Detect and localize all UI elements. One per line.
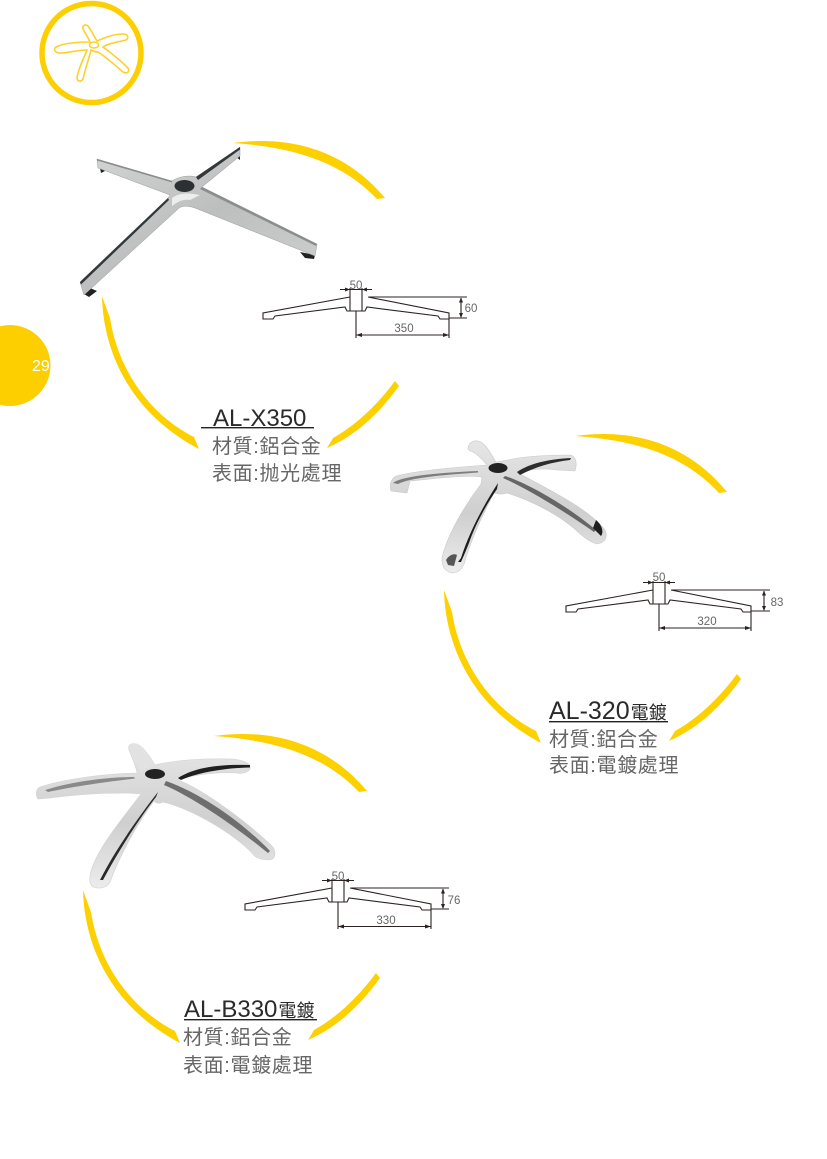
label: model and specs xyxy=(201,405,342,485)
diagram: side profile with dimensions: 60 xyxy=(465,303,477,315)
icon: yellow circle with five-star chair base xyxy=(42,4,141,102)
diagram: side profile with dimensions xyxy=(566,572,783,631)
diagram: side profile with dimensions: 83 xyxy=(771,597,783,609)
label: model and specs: 表面:抛光處理 xyxy=(212,462,342,485)
label: model and specs: 材質:鋁合金 xyxy=(183,1026,292,1049)
label: model and specs: 材質:鋁合金 xyxy=(212,435,321,458)
arc: yellow ring segments xyxy=(83,734,380,1043)
label: model and specs: 材質:鋁合金 xyxy=(549,728,658,751)
diagram: side profile with dimensions: 76 xyxy=(448,895,460,907)
label: model and specs: 表面:電鍍處理 xyxy=(183,1054,313,1077)
diagram: side profile with dimensions: 320 xyxy=(697,616,717,628)
diagram: side profile with dimensions: 50 xyxy=(653,572,665,584)
diagram: side profile with dimensions: 350 xyxy=(394,323,414,335)
label: model and specs: AL-B330電鍍 xyxy=(184,996,314,1023)
page number tab xyxy=(0,325,50,406)
diagram: side profile with dimensions xyxy=(263,280,477,338)
panel: AL-B330 xyxy=(36,734,460,1077)
label: model and specs: AL-X350 xyxy=(213,405,306,432)
product photo: chrome five-star base xyxy=(390,441,606,573)
diagram: side profile with dimensions: 50 xyxy=(350,280,362,292)
product photo: chrome five-star base xyxy=(36,744,275,888)
label: model and specs xyxy=(549,697,679,777)
page number tab: 29 xyxy=(32,358,50,375)
label: model and specs: AL-320電鍍 xyxy=(549,697,667,725)
diagram: side profile with dimensions xyxy=(245,871,460,929)
panel: AL-X350 xyxy=(80,141,477,485)
product photo: X-shaped polished base xyxy=(80,147,317,297)
arc: yellow ring segments xyxy=(444,434,741,743)
diagram: side profile with dimensions: 50 xyxy=(332,871,344,883)
panel: AL-320 xyxy=(390,434,783,777)
label: model and specs xyxy=(183,996,317,1077)
diagram: side profile with dimensions: 330 xyxy=(376,915,396,927)
label: model and specs: 表面:電鍍處理 xyxy=(549,754,679,777)
arc: yellow ring segments xyxy=(102,141,399,449)
